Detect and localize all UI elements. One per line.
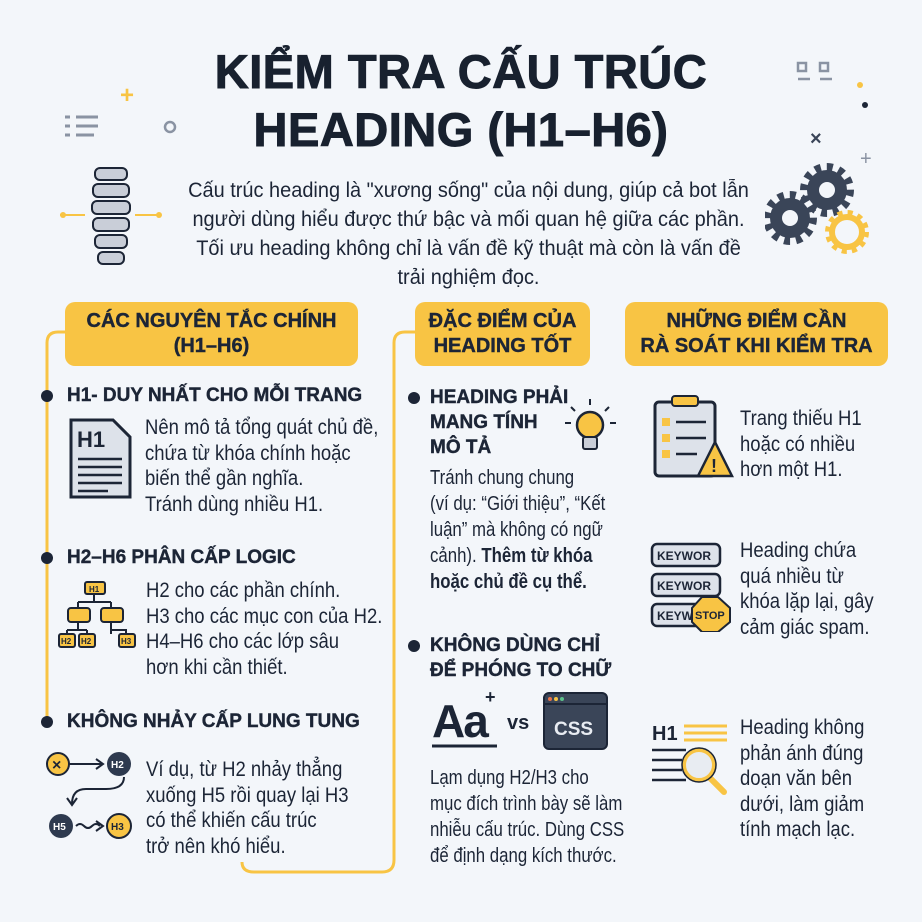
bullet: descriptive bbox=[408, 385, 616, 593]
item: keyword stuffing: Heading chứa bbox=[740, 538, 856, 562]
header: audit: RÀ SOÁT KHI KIỂM TRA bbox=[640, 335, 873, 357]
intro text: trải nghiệm đọc. bbox=[398, 266, 539, 289]
decorative top right bbox=[796, 62, 872, 165]
bullet: descriptive: (ví dụ: “Giới thiệu”, “Kết bbox=[430, 493, 605, 515]
bullet: descriptive: cảnh). Thêm từ khóa bbox=[430, 545, 592, 567]
bullet: descriptive: HEADING PHẢI bbox=[430, 387, 568, 408]
panel: audit checks bbox=[625, 302, 888, 841]
header: principles: (H1–H6) bbox=[174, 335, 249, 357]
bullet: H2-H6 hierarchy: hơn khi cần thiết. bbox=[146, 654, 288, 678]
icon: clipboard warning bbox=[654, 395, 734, 478]
icon: H1 document bbox=[70, 418, 132, 498]
bullet: descriptive: MÔ TẢ bbox=[430, 437, 491, 458]
icon: jump flow bbox=[46, 752, 132, 839]
bullet: not for font size: KHÔNG DÙNG CHỈ bbox=[430, 635, 600, 656]
header: good heading bbox=[415, 302, 590, 366]
bullet: no level skipping: trở nên khó hiểu. bbox=[146, 834, 286, 858]
icon: tree: H3 bbox=[121, 637, 132, 646]
panel: good heading traits bbox=[408, 302, 624, 867]
title bbox=[215, 44, 707, 156]
item: keyword stuffing: khóa lặp lại, gây bbox=[740, 589, 874, 613]
header: audit bbox=[625, 302, 888, 366]
bullet: descriptive: luận” mà không có ngữ bbox=[430, 519, 603, 541]
icon: Aa vs CSS: Aa bbox=[432, 695, 489, 747]
intro text bbox=[188, 179, 749, 289]
bullet: no level skipping: KHÔNG NHẢY CẤP LUNG TUNG bbox=[67, 711, 360, 732]
header: principles bbox=[65, 302, 358, 366]
bullet: H2-H6 hierarchy: H4–H6 cho các lớp sâu bbox=[146, 629, 339, 653]
item: missing H1: hơn một H1. bbox=[740, 457, 843, 481]
item: missing H1: hoặc có nhiều bbox=[740, 432, 855, 456]
bullet: no level skipping bbox=[41, 709, 360, 858]
bullet: H1 unique: H1- DUY NHẤT CHO MỖI TRANG bbox=[67, 385, 362, 406]
item: mismatched heading bbox=[652, 715, 864, 841]
header: good heading: HEADING TỐT bbox=[434, 335, 571, 357]
title: HEADING (H1–H6) bbox=[254, 103, 668, 156]
icon: tree: H1 bbox=[89, 585, 100, 594]
icon: jump flow: H2 bbox=[111, 760, 124, 771]
icon: H1 document: H1 bbox=[77, 427, 105, 452]
icon: keyword stop bbox=[650, 542, 731, 632]
bullet: no level skipping: xuống H5 rồi quay lại H3 bbox=[146, 782, 348, 806]
icon: Aa vs CSS: CSS bbox=[554, 719, 593, 740]
icon: Aa vs CSS: vs bbox=[507, 712, 529, 734]
bullet: H2-H6 hierarchy: H2 cho các phần chính. bbox=[146, 578, 340, 602]
icon: H1 magnifier: H1 bbox=[652, 723, 678, 745]
icon: jump flow: H5 bbox=[53, 822, 66, 833]
bullet: not for font size: Lạm dụng H2/H3 cho bbox=[430, 767, 589, 789]
bullet: H1 unique bbox=[41, 383, 378, 516]
bullet: descriptive: MANG TÍNH bbox=[430, 412, 538, 433]
bullet: H2-H6 hierarchy: H3 cho các mục con của H2. bbox=[146, 604, 382, 628]
icon: light bulb bbox=[565, 399, 616, 450]
icon: H1 magnifier bbox=[652, 723, 727, 795]
icon: keyword stop: KEYW bbox=[657, 609, 694, 623]
header: audit: NHỮNG ĐIỂM CẦN bbox=[667, 310, 846, 332]
icon: keyword stop: STOP bbox=[695, 610, 725, 622]
icon: spine bbox=[60, 167, 162, 265]
icon: jump flow: × bbox=[52, 757, 61, 774]
icon: clipboard warning: ! bbox=[711, 456, 717, 476]
title: KIỂM TRA CẤU TRÚC bbox=[215, 45, 707, 98]
header: principles: CÁC NGUYÊN TẮC CHÍNH bbox=[86, 310, 336, 332]
item: mismatched heading: dưới, làm giảm bbox=[740, 792, 864, 816]
item: keyword stuffing bbox=[650, 538, 874, 638]
decorative icons top bbox=[65, 85, 176, 136]
bullet: descriptive: hoặc chủ đề cụ thể. bbox=[430, 571, 587, 593]
item: keyword stuffing: cảm giác spam. bbox=[740, 614, 869, 638]
bullet: H2-H6 hierarchy bbox=[41, 545, 382, 678]
bullet: not for font size bbox=[408, 633, 624, 867]
panel: principles bbox=[41, 302, 382, 858]
icon: keyword stop: KEYWOR bbox=[657, 579, 711, 593]
item: mismatched heading: doạn văn bên bbox=[740, 766, 852, 790]
item: missing H1 bbox=[654, 395, 862, 481]
item: keyword stuffing: quá nhiều từ bbox=[740, 564, 844, 588]
header: good heading: ĐẶC ĐIỂM CỦA bbox=[429, 310, 576, 332]
item: missing H1: Trang thiếu H1 bbox=[740, 406, 862, 430]
icon: jump flow: H3 bbox=[111, 822, 124, 833]
bullet: H1 unique: Tránh dùng nhiều H1. bbox=[145, 492, 323, 516]
intro text: Tối ưu heading không chỉ là vấn đề kỹ thuật mà còn là vấn đề bbox=[196, 237, 741, 260]
icon: gears bbox=[765, 163, 869, 254]
item: mismatched heading: tính mạch lạc. bbox=[740, 817, 855, 841]
icon: Aa vs CSS bbox=[432, 691, 608, 750]
bullet: descriptive: Tránh chung chung bbox=[430, 467, 574, 489]
icon: tree bbox=[58, 581, 136, 648]
icon: tree: H2 bbox=[61, 637, 72, 646]
intro text: người dùng hiểu được thứ bậc và mối quan hệ giữa các phần. bbox=[192, 208, 745, 231]
decorative top right: × bbox=[810, 128, 822, 150]
bullet: no level skipping: Ví dụ, từ H2 nhảy thẳng bbox=[146, 757, 342, 781]
item: mismatched heading: phản ánh đúng bbox=[740, 740, 863, 764]
bullet: H1 unique: Nên mô tả tổng quát chủ đề, bbox=[145, 415, 378, 439]
bullet: H2-H6 hierarchy: H2–H6 PHÂN CẤP LOGIC bbox=[67, 547, 296, 568]
intro text: Cấu trúc heading là "xương sống" của nội dung, giúp cả bot lẫn bbox=[188, 179, 749, 202]
bullet: not for font size: nhiễu cấu trúc. Dùng CSS bbox=[430, 819, 624, 841]
bullet: H1 unique: chứa từ khóa chính hoặc bbox=[145, 440, 351, 464]
bullet: H1 unique: biến thể gần nghĩa. bbox=[145, 466, 303, 490]
item: mismatched heading: Heading không bbox=[740, 715, 864, 739]
bullet: not for font size: mục đích trình bày sẽ làm bbox=[430, 793, 622, 815]
icon: tree: H2 bbox=[81, 637, 92, 646]
bullet: not for font size: để định dạng kích thước. bbox=[430, 845, 617, 867]
icon: keyword stop: KEYWOR bbox=[657, 549, 711, 563]
bullet: not for font size: ĐỂ PHÓNG TO CHỮ bbox=[430, 660, 611, 681]
bullet: no level skipping: có thể khiến cấu trúc bbox=[146, 808, 317, 832]
